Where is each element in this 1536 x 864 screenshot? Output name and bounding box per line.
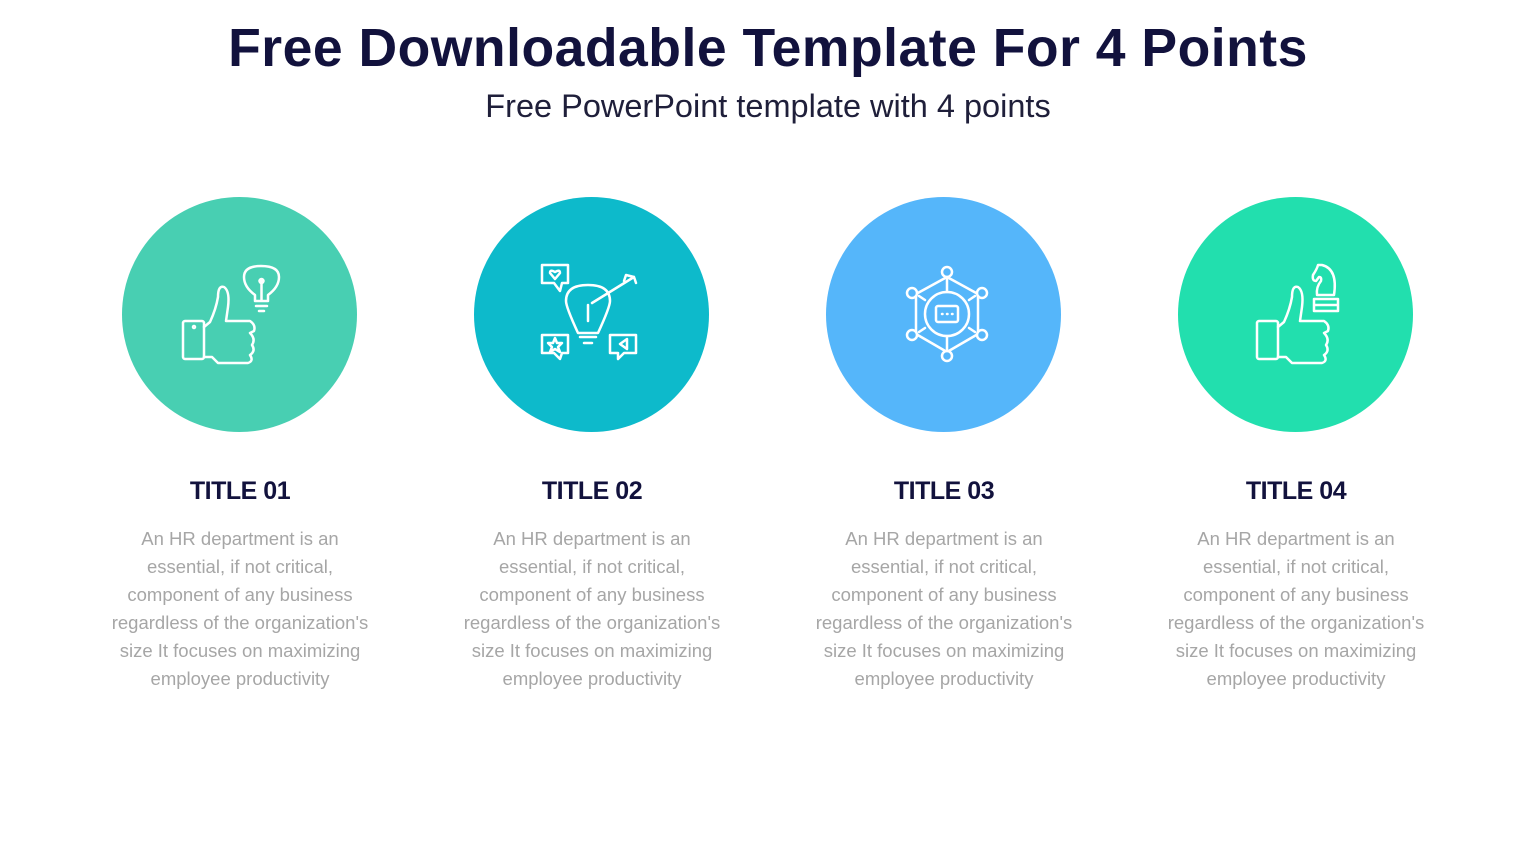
text 4: essential, if not critical, xyxy=(1203,556,1389,577)
text 2: employee productivity xyxy=(503,668,681,689)
circle 2: bulb with target xyxy=(474,197,709,432)
title 1: TITLE 01 xyxy=(190,477,290,505)
text 3: size It focuses on maximizing xyxy=(824,640,1064,661)
title 4: TITLE 04 xyxy=(1246,477,1346,505)
text 1 xyxy=(112,528,368,689)
title 2: TITLE 02 xyxy=(542,477,642,505)
text 2: regardless of the organization's xyxy=(464,612,720,633)
title: Free Downloadable Template For 4 Points xyxy=(228,19,1308,78)
text 4: regardless of the organization's xyxy=(1168,612,1424,633)
text 1: An HR department is an xyxy=(141,528,339,549)
text 2: component of any business xyxy=(479,584,705,605)
text 1: essential, if not critical, xyxy=(147,556,333,577)
circle 1: thumbs up + bulb xyxy=(122,197,357,432)
text 4: An HR department is an xyxy=(1197,528,1395,549)
text 2 xyxy=(464,528,720,689)
text 1: employee productivity xyxy=(151,668,329,689)
text 3: essential, if not critical, xyxy=(851,556,1037,577)
text 2: size It focuses on maximizing xyxy=(472,640,712,661)
title 3: TITLE 03 xyxy=(894,477,994,505)
subtitle: Free PowerPoint template with 4 points xyxy=(485,88,1051,124)
text 4 xyxy=(1168,528,1424,689)
text 2: An HR department is an xyxy=(493,528,691,549)
text 3 xyxy=(816,528,1072,689)
circle 4: thumbs up + chess knight xyxy=(1178,197,1413,432)
text 1: component of any business xyxy=(127,584,353,605)
text 3: An HR department is an xyxy=(845,528,1043,549)
text 3: component of any business xyxy=(831,584,1057,605)
text 4: employee productivity xyxy=(1207,668,1385,689)
text 4: component of any business xyxy=(1183,584,1409,605)
text 3: regardless of the organization's xyxy=(816,612,1072,633)
text 1: regardless of the organization's xyxy=(112,612,368,633)
text 4: size It focuses on maximizing xyxy=(1176,640,1416,661)
text 2: essential, if not critical, xyxy=(499,556,685,577)
text 1: size It focuses on maximizing xyxy=(120,640,360,661)
circle 3: network hexagon xyxy=(826,197,1061,432)
text 3: employee productivity xyxy=(855,668,1033,689)
